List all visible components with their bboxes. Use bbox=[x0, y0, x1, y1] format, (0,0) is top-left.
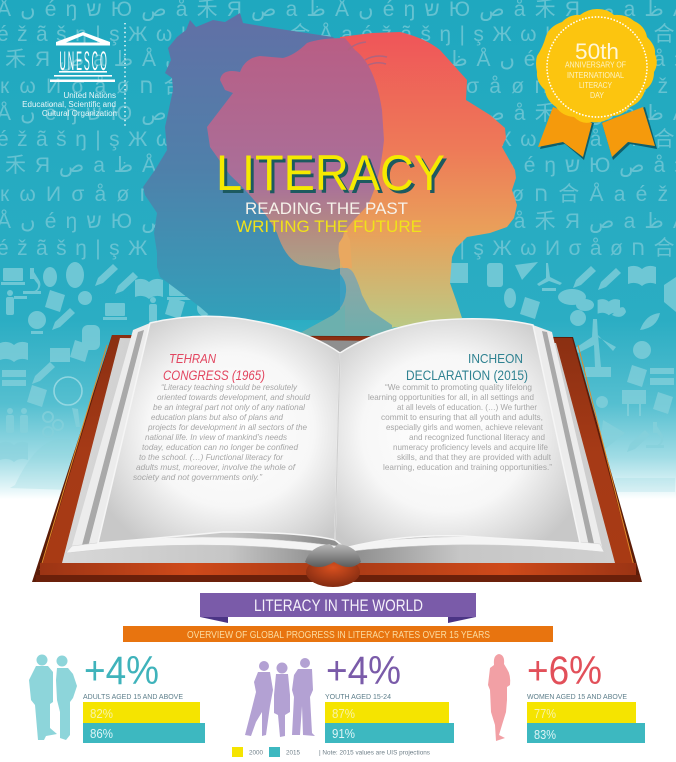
quote text: national life. In view of mankind’s needs bbox=[145, 432, 288, 442]
small figure shoulder bbox=[286, 305, 345, 345]
stat: youth bbox=[245, 649, 454, 743]
clasp cap bbox=[305, 544, 361, 567]
icon: three youths bbox=[245, 658, 315, 737]
quote text: today, education can no longer be confined bbox=[142, 442, 298, 452]
subtitle: writing the future: WRITING THE FUTURE bbox=[236, 217, 422, 236]
banner: literacy in the world bbox=[200, 593, 476, 623]
badge text: 50th bbox=[575, 39, 619, 64]
glyph pattern background: 禾 Я ص a ظ Å ں é ŋ ש Ю ص å 禾 Я ص a ظ Å ں é ŋ ש Ю ص å 禾 bbox=[5, 154, 676, 177]
ribbon tails bbox=[538, 107, 655, 157]
percent change: +6% bbox=[527, 649, 602, 693]
bar bbox=[123, 626, 553, 642]
badge text bbox=[565, 39, 626, 100]
quote text: society and not governments only.” bbox=[133, 472, 263, 482]
quote text: especially girls and women, achieve relevant bbox=[386, 422, 544, 432]
head: small front figure bbox=[340, 268, 392, 345]
head: red profile bbox=[340, 32, 517, 335]
title shadow: LITERACY bbox=[219, 148, 448, 204]
bar 2000 bbox=[527, 702, 636, 723]
icon: two adults bbox=[29, 654, 77, 740]
right page bbox=[335, 319, 580, 548]
open book bbox=[32, 316, 642, 587]
legend label 2000: 2000 bbox=[249, 750, 263, 756]
temple base bbox=[59, 71, 107, 73]
heading: Declaration: DECLARATION (2015) bbox=[406, 368, 528, 383]
panel: Tehran Congress bbox=[133, 351, 310, 482]
banner text: LITERACY IN THE WORLD bbox=[254, 596, 423, 615]
clasp body bbox=[306, 557, 360, 587]
glyph pattern background: Å ں é ŋ ש Ю ص å 禾 Я ص a ظ Å ں é ŋ ש Ю ص å 禾 Я ص a ظ Å bbox=[0, 210, 676, 233]
left page stack bbox=[70, 323, 150, 553]
rosette bbox=[536, 9, 657, 123]
bar 2015 bbox=[325, 723, 454, 743]
value 2000: 77% bbox=[534, 707, 556, 721]
icon: woman bbox=[488, 654, 510, 741]
orange highlight bbox=[338, 232, 352, 268]
badge text: INTERNATIONAL bbox=[567, 71, 624, 80]
organisation name: Cultural Organization bbox=[42, 109, 117, 118]
quote text: and recognized functional literacy and bbox=[409, 432, 545, 442]
bar 2000 bbox=[83, 702, 200, 723]
book cover bbox=[32, 335, 642, 582]
quote text bbox=[133, 382, 310, 482]
value 2015: 91% bbox=[332, 727, 355, 741]
stat: women bbox=[488, 649, 645, 743]
badge text: DAY bbox=[590, 91, 605, 100]
quote text: “We commit to promoting quality lifelong bbox=[385, 382, 532, 392]
title word: LITERACY bbox=[216, 145, 445, 201]
badge text: LITERACY bbox=[579, 81, 613, 90]
bar 2000 bbox=[325, 702, 449, 723]
quote text: “Literacy teaching should be resolutely bbox=[161, 382, 298, 392]
value 2015: 83% bbox=[534, 728, 556, 742]
banner band bbox=[200, 593, 476, 617]
anniversary badge bbox=[536, 9, 657, 160]
legend swatch 2000 bbox=[232, 747, 243, 757]
glyph pattern background: к ω И σ å ø ח 合 Å a é ž ã š ŋ | ş Ж ω И σ å ø ח 合 Å a é ž ã bbox=[0, 75, 676, 98]
organisation name: Educational, Scientific and bbox=[22, 100, 116, 109]
bar 2015 bbox=[527, 723, 645, 743]
subtitle: reading the past: READING THE PAST bbox=[245, 199, 408, 218]
bar text: OVERVIEW OF GLOBAL PROGRESS IN LITERACY RATES OVER 15 YEARS bbox=[187, 629, 490, 641]
legend bbox=[232, 747, 431, 757]
temple letters: UNESCO bbox=[60, 47, 107, 77]
title bbox=[216, 145, 448, 236]
silhouette: three overlapping heads bbox=[143, 13, 517, 345]
quote text bbox=[368, 382, 552, 472]
value 2000: 87% bbox=[332, 707, 355, 721]
clasp bbox=[305, 544, 361, 587]
head: pink profile bbox=[207, 38, 384, 270]
value 2015: 86% bbox=[90, 727, 113, 741]
value 2000: 82% bbox=[90, 707, 113, 721]
quote text: be an integral part not only of any national bbox=[153, 402, 306, 412]
quote text: skills, and that they are provided with adult bbox=[397, 452, 552, 462]
page edge curves bbox=[66, 536, 604, 553]
quote text: to the school. (…) Functional literacy for bbox=[139, 452, 284, 462]
spine fold bbox=[335, 353, 340, 540]
glyph pattern background: к ω И σ å ø ח 合 Å a é ž ã š ŋ | ş Ж ω И σ å ø ח 合 Å a é ž ã bbox=[0, 183, 676, 206]
head: blue profile bbox=[143, 13, 420, 320]
subtitle bar bbox=[123, 626, 553, 642]
quote text: learning opportunities for all, in all settings and bbox=[368, 392, 534, 402]
page block bbox=[62, 338, 615, 563]
quote text: adults must, moreover, involve the whole of bbox=[136, 462, 297, 472]
organisation name bbox=[22, 91, 117, 118]
banner folds bbox=[200, 617, 476, 623]
glyph pattern background bbox=[0, 0, 676, 260]
label: YOUTH AGED 15-24 bbox=[325, 692, 391, 701]
education icons background bbox=[0, 262, 676, 492]
quote text: oriented towards development, and should bbox=[157, 392, 310, 402]
stat: adults bbox=[29, 649, 205, 743]
bar 2015 bbox=[83, 723, 205, 743]
ribbon shadow bbox=[540, 107, 657, 160]
glyph pattern background: 禾 Я ص a ظ Å ں é ŋ ש Ю ص å 禾 Я ص a ظ Å ں é ŋ ש Ю ص å 禾 bbox=[5, 48, 676, 71]
organisation name: United Nations bbox=[64, 91, 116, 100]
label: ADULTS AGED 15 AND ABOVE bbox=[83, 692, 183, 701]
hair strands bbox=[348, 42, 387, 65]
quote text: education plans but also of plans and bbox=[151, 412, 283, 422]
legend swatch 2015 bbox=[269, 747, 280, 757]
glyph pattern background: Å ں é ŋ ש Ю ص å 禾 Я ص a ظ Å ں é ŋ ש Ю ص å 禾 Я ص a ظ Å bbox=[0, 102, 676, 125]
quote text: numeracy proficiency levels and acquire life bbox=[393, 442, 548, 452]
quote text: at all levels of education. (…) We further bbox=[397, 402, 537, 412]
quote text: learning, education and training opportunities.” bbox=[383, 462, 552, 472]
legend label 2015: 2015 bbox=[286, 750, 300, 756]
quote text: commit to ensuring that all youth and adults, bbox=[381, 412, 543, 422]
heading: Tehran: TEHRAN bbox=[169, 351, 217, 366]
left page bbox=[98, 316, 340, 543]
badge text: ANNIVERSARY OF bbox=[565, 60, 626, 70]
label: WOMEN AGED 15 AND ABOVE bbox=[527, 692, 627, 701]
UNESCO logo bbox=[22, 32, 117, 118]
right page stack bbox=[533, 325, 603, 551]
heading: Incheon: INCHEON bbox=[468, 351, 523, 366]
quote text: projects for development in all sectors of the bbox=[147, 422, 307, 432]
temple roof bbox=[56, 32, 110, 46]
percent change: +4% bbox=[84, 649, 159, 693]
blue highlight within figure bbox=[340, 274, 346, 308]
percent change: +4% bbox=[326, 649, 401, 693]
heading: Congress: CONGRESS (1965) bbox=[163, 368, 265, 383]
legend note: | Note: 2015 values are UIS projections bbox=[319, 750, 431, 756]
panel: Incheon Declaration bbox=[368, 351, 552, 472]
